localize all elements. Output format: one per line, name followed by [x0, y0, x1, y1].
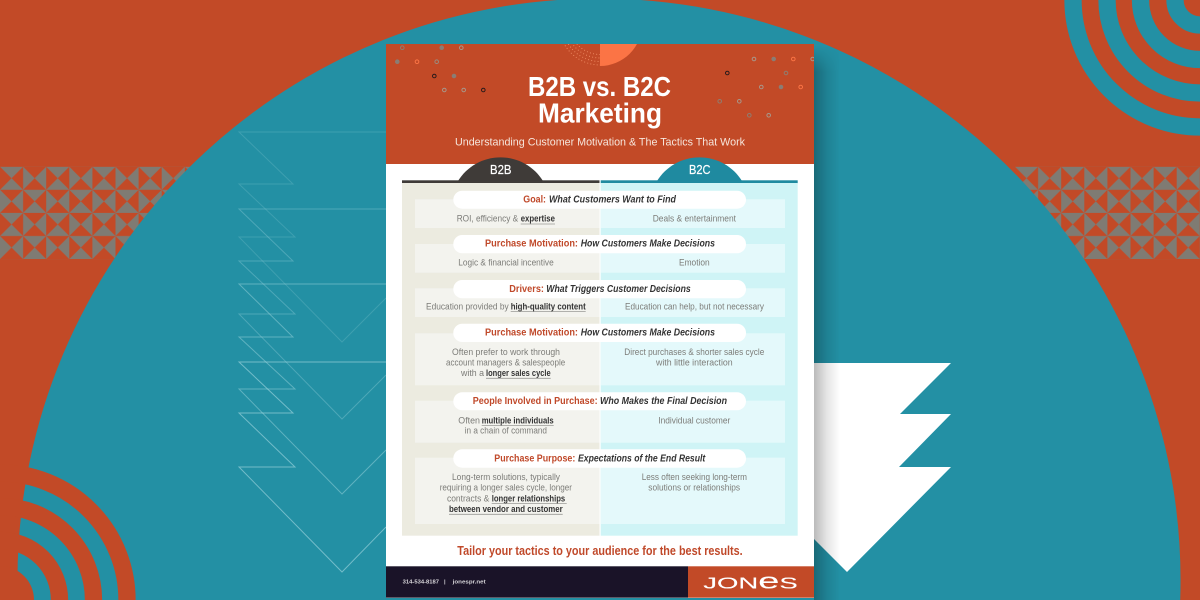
row: goal: Goal:	[523, 194, 546, 206]
row: purchase purpose	[440, 449, 747, 514]
row: goal: Deals & entertainment	[653, 214, 737, 224]
row: purchase motivation second	[446, 324, 764, 378]
column panel B2B	[402, 180, 600, 536]
column tab B2B	[458, 157, 543, 181]
header band	[386, 44, 814, 164]
row: purchase purpose: contracts &	[447, 493, 489, 503]
footer logo	[688, 566, 814, 598]
footer contact bar	[386, 566, 688, 598]
row: purchase motivation second: Often prefer to work through	[452, 347, 560, 357]
outlined arrow shapes left	[239, 132, 386, 572]
row: purchase motivation: Emotion	[679, 258, 710, 268]
header dots right	[718, 57, 814, 117]
row: goal	[453, 191, 746, 224]
row: drivers: Education can help, but not necessary	[625, 301, 765, 311]
row: purchase motivation second: How Customers Make Decisions	[581, 327, 715, 339]
white arrow shape right	[800, 363, 951, 572]
title	[528, 71, 671, 128]
column tab B2B: B2B	[490, 162, 512, 177]
triangle pattern band left	[0, 167, 240, 259]
row: purchase motivation second: longer sales cycle	[486, 368, 551, 378]
column panel B2C	[601, 180, 798, 536]
row: drivers: high-quality content	[511, 301, 586, 311]
title: B2B vs. B2C	[528, 71, 671, 102]
subtitle: Understanding Customer Motivation & The Tactics That Work	[455, 137, 745, 149]
concentric rings top right	[1073, 0, 1200, 127]
triangle pattern band right	[1015, 167, 1200, 259]
row: goal: ROI, efficiency &	[457, 214, 518, 224]
row: goal: expertise	[521, 214, 555, 224]
row: people involved: multiple individuals	[482, 415, 554, 425]
row: purchase purpose: requiring a longer sales cycle, longer	[440, 483, 572, 493]
row: purchase purpose: Long-term solutions, typically	[452, 472, 561, 482]
page shadow	[814, 50, 836, 600]
row: purchase motivation second: with little interaction	[655, 357, 733, 367]
row: people involved: Who Makes the Final Decision	[600, 395, 727, 407]
footer contact bar: |	[444, 579, 446, 585]
footer logo: JON e S	[703, 568, 798, 594]
row: drivers: What Triggers Customer Decisions	[546, 283, 691, 295]
column tab B2C: B2C	[689, 162, 710, 177]
row: purchase motivation second: Purchase Motivation:	[485, 327, 578, 339]
infographic page	[386, 0, 814, 598]
row: people involved	[453, 392, 746, 436]
row: purchase motivation: How Customers Make Decisions	[581, 238, 715, 250]
row: drivers: Education provided by	[426, 301, 509, 311]
row: purchase purpose: Purchase Purpose:	[494, 452, 575, 464]
header dots left	[396, 46, 485, 92]
row: purchase purpose: between vendor and customer	[449, 504, 563, 514]
row: purchase motivation: Logic & financial incentive	[458, 258, 554, 268]
row: purchase purpose: Expectations of the End Result	[578, 452, 706, 464]
concentric rings bottom left	[0, 473, 127, 600]
column tab B2C	[657, 157, 742, 181]
row: purchase motivation second: with a	[460, 368, 484, 378]
row: purchase purpose: Less often seeking long-term	[642, 472, 747, 482]
row: purchase motivation	[453, 235, 746, 268]
row: purchase purpose: solutions or relationships	[648, 483, 741, 493]
row: drivers: Drivers:	[509, 283, 544, 295]
footer contact bar: jonespr.net	[452, 579, 486, 585]
tagline: Tailor your tactics to your audience for the best results.	[457, 544, 743, 558]
row: purchase purpose: longer relationships	[492, 493, 565, 503]
row: people involved: Individual customer	[658, 415, 730, 425]
row: people involved: in a chain of command	[465, 426, 547, 436]
title: Marketing	[538, 98, 662, 128]
header quarter circle	[564, 44, 637, 66]
row: people involved: People Involved in Purchase:	[473, 395, 598, 407]
row: goal: What Customers Want to Find	[549, 194, 676, 206]
row: people involved: Often	[458, 415, 480, 425]
row: purchase motivation: Purchase Motivation:	[485, 238, 578, 250]
row: drivers	[426, 280, 765, 312]
row: purchase motivation second: account managers & salespeople	[446, 357, 565, 367]
row: purchase motivation second: Direct purchases & shorter sales cycle	[624, 347, 764, 357]
footer contact bar: 314-534-8187	[403, 579, 439, 585]
